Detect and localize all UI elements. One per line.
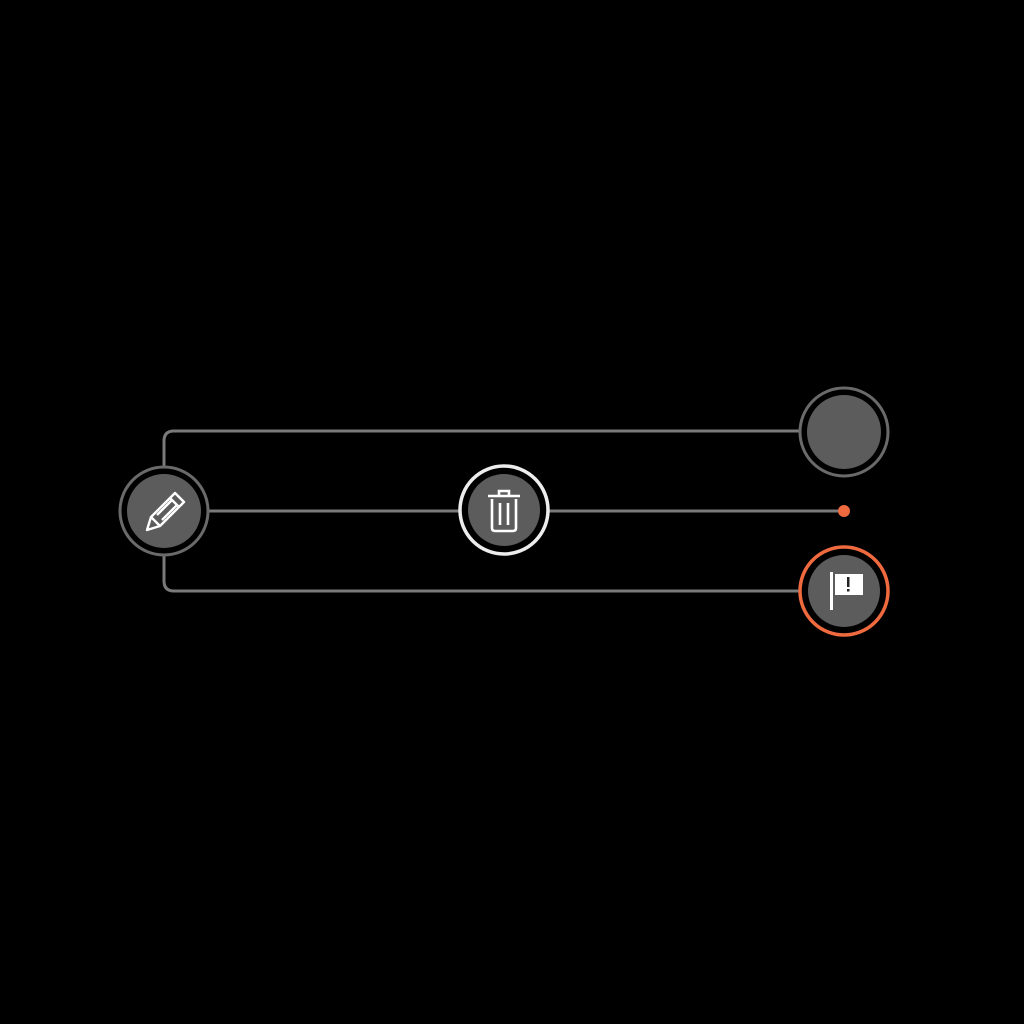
node: pencil <box>120 467 208 555</box>
endpoint dot <box>838 505 850 517</box>
icon: trash can <box>488 491 520 531</box>
connector: middle line <box>209 510 844 512</box>
node: trash <box>460 466 548 554</box>
icon: flag with exclamation <box>830 572 863 610</box>
node: empty circle <box>800 388 888 476</box>
node: flag alert <box>800 547 888 635</box>
connector: bottom branch <box>164 555 800 591</box>
connector: top branch <box>164 431 800 467</box>
icon: pencil <box>147 493 184 530</box>
